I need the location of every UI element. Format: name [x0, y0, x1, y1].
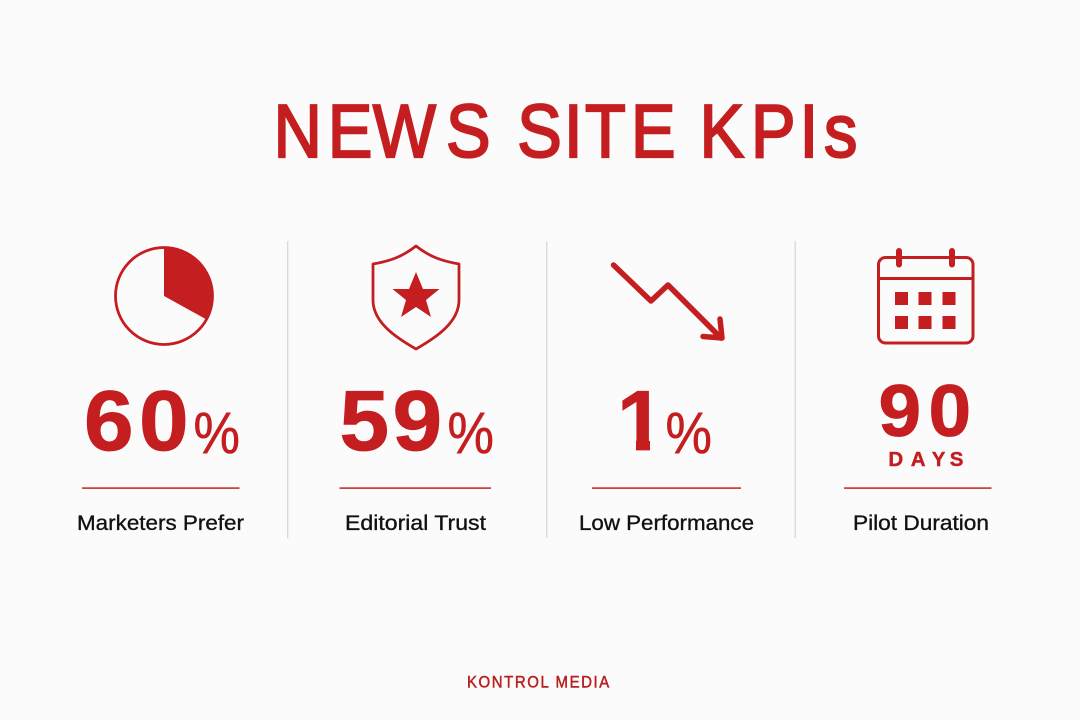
icon: shield with star: [373, 246, 459, 349]
panel: editorial trust: [339, 246, 494, 535]
stat: 59%: [339, 374, 494, 469]
label: Pilot Duration: [853, 511, 989, 535]
icon: pie chart: [116, 247, 213, 344]
panel: low performance: [579, 265, 754, 535]
icon: declining arrow: [614, 265, 722, 338]
stat: 60%: [84, 374, 240, 469]
unit: days: DAYS: [888, 448, 963, 471]
label: Low Performance: [579, 511, 754, 535]
label: Editorial Trust: [345, 511, 486, 535]
label: Marketers Prefer: [77, 511, 244, 535]
stat: 1%: [622, 390, 710, 454]
footer brand: KONTROL MEDIA: [467, 674, 611, 692]
panel: marketers prefer: [77, 247, 244, 535]
rule: [844, 487, 992, 489]
stat: 1%: %: [666, 400, 712, 466]
stat: 1%: 1: [617, 374, 664, 469]
stat: 90: 90: [879, 370, 971, 452]
stat: 60%: 60: [84, 374, 189, 469]
icon: calendar: [878, 251, 973, 343]
rule: [340, 487, 491, 489]
panel: pilot duration: [844, 251, 992, 535]
stat: 59%: 59: [339, 374, 442, 469]
rule: [82, 487, 240, 489]
stat: 60%: %: [194, 400, 240, 466]
rule: [592, 487, 741, 489]
stat: 59%: %: [448, 400, 494, 466]
title: NEWS SITE KPIs: [274, 90, 857, 174]
